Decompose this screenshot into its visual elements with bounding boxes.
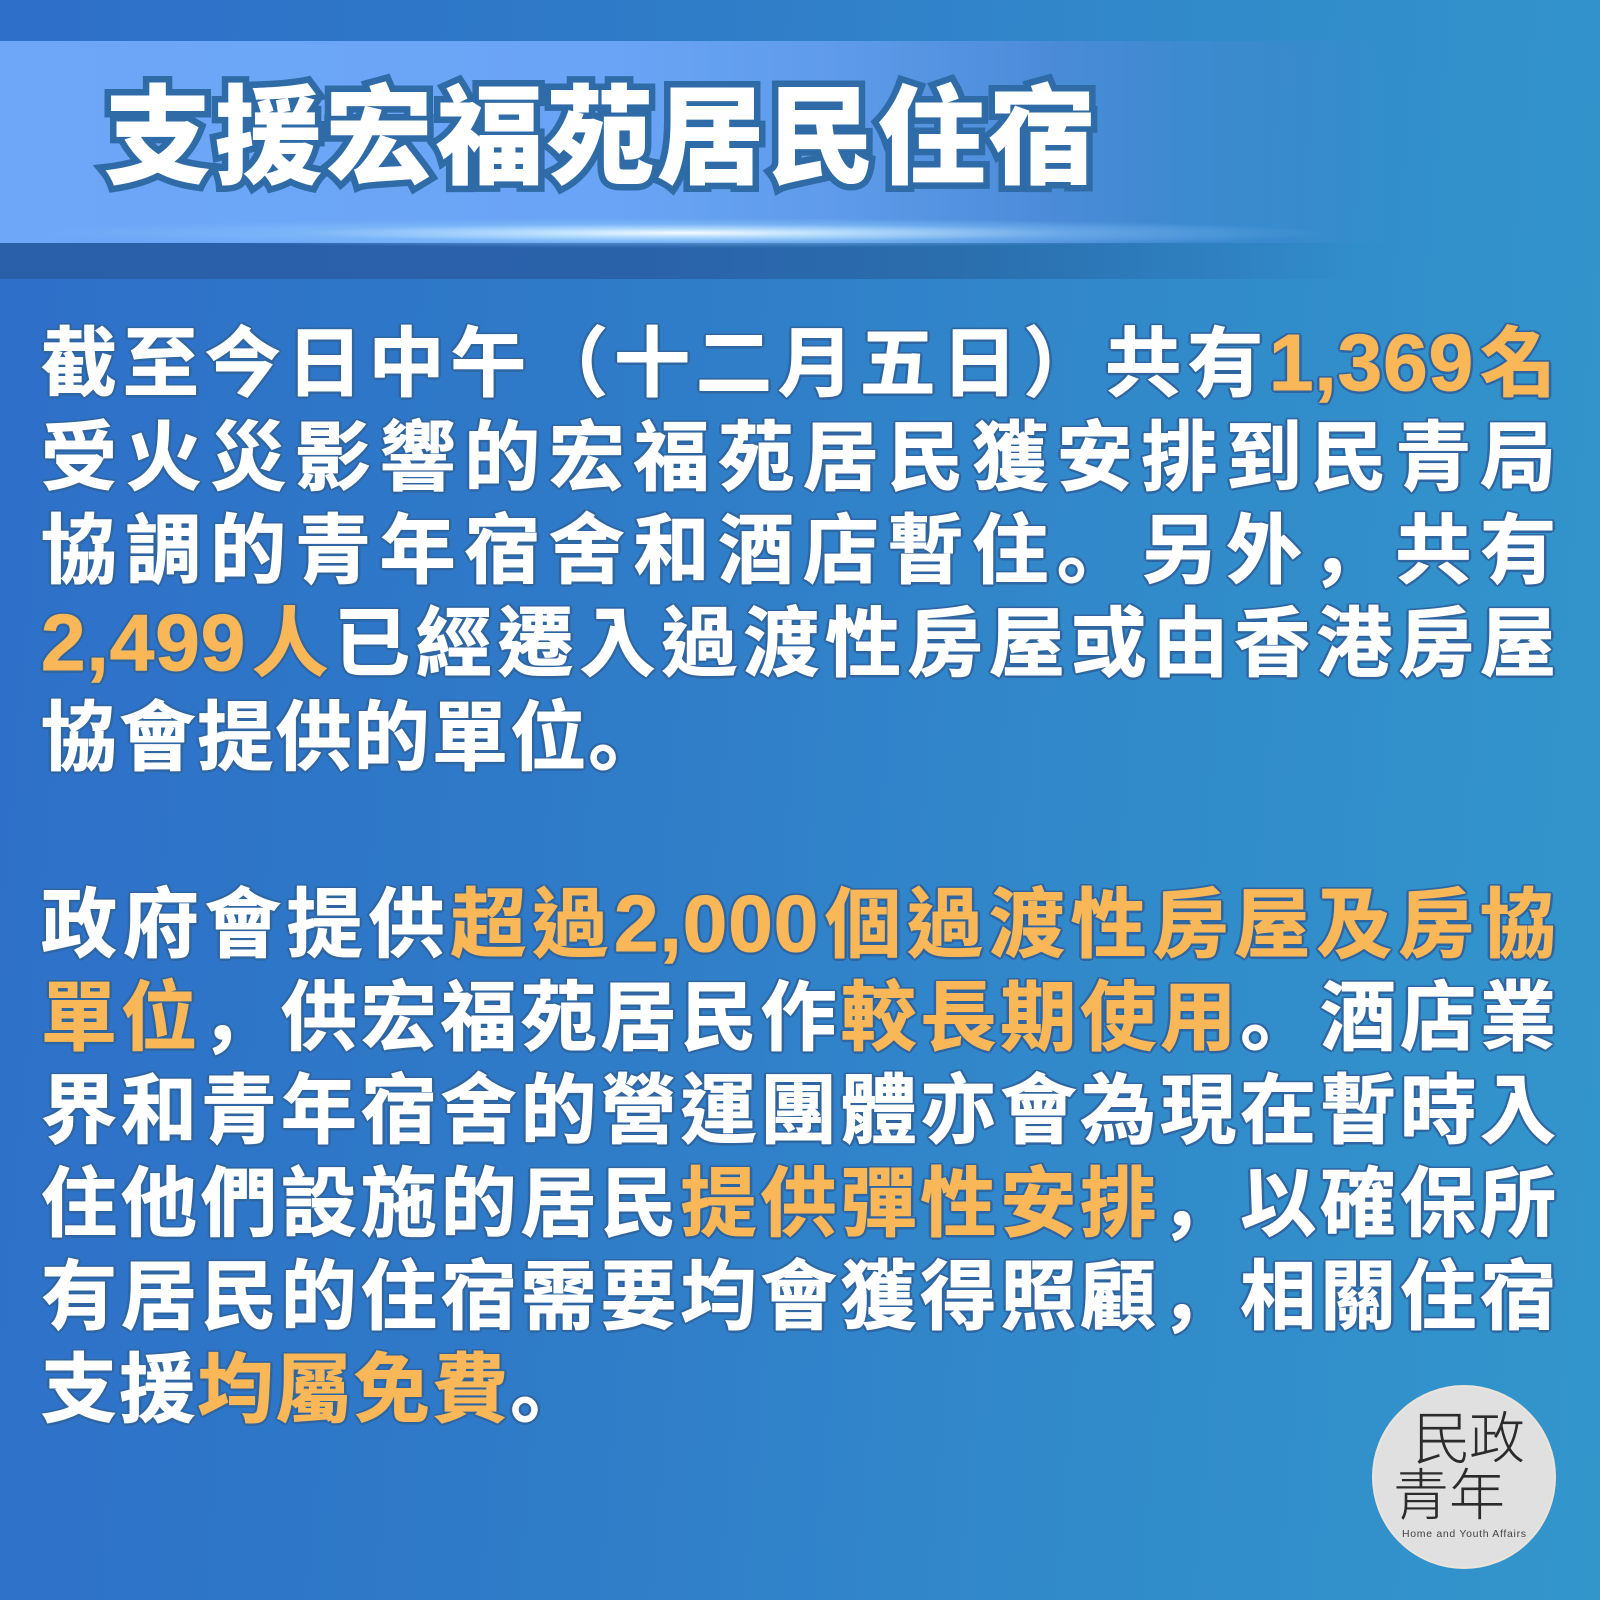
line 4: 住他們設施的居民提供彈性安排，以確保所: [41, 1142, 1556, 1252]
line 5: 協會提供的單位。: [41, 676, 667, 786]
logo: Home and Youth Affairs: Home and Youth Affairs: [1402, 1528, 1526, 1540]
line 1: 截至今日中午（十二月五日）共有1,369名: [41, 318, 1556, 407]
line 4: 2,499人已經遷入過渡性房屋或由香港房屋: [41, 598, 1556, 687]
title banner: [0, 41, 1600, 243]
logo: Home and Youth Affairs: 年: [1449, 1451, 1505, 1532]
logo: Home and Youth Affairs: 青: [1393, 1451, 1449, 1532]
title: 支援宏福苑居民住宿: [104, 51, 1099, 207]
line 2: 受火災影響的宏福苑居民獲安排到民青局: [41, 416, 1556, 501]
banner light glow: [40, 218, 1330, 248]
logo: Home and Youth Affairs: 民: [1413, 1392, 1471, 1476]
paragraph 2: [40, 879, 1557, 1438]
line 5: 有居民的住宿需要均會獲得照顧，相關住宿: [41, 1235, 1556, 1345]
logo: Home and Youth Affairs: 政: [1469, 1394, 1525, 1475]
line 1: 政府會提供超過2,000個過渡性房屋及房協: [41, 879, 1556, 968]
banner shadow strip: [0, 243, 1600, 279]
paragraph 1: [40, 318, 1556, 786]
line 2: 單位，供宏福苑居民作較長期使用。酒店業: [41, 956, 1556, 1066]
logo: Home and Youth Affairs: [1372, 1385, 1556, 1569]
line 3: 界和青年宿舍的營運團體亦會為現在暫時入: [41, 1069, 1556, 1154]
line 6: 支援均屬免費。: [41, 1328, 588, 1438]
line 3: 協調的青年宿舍和酒店暫住。另外，共有: [41, 489, 1556, 599]
